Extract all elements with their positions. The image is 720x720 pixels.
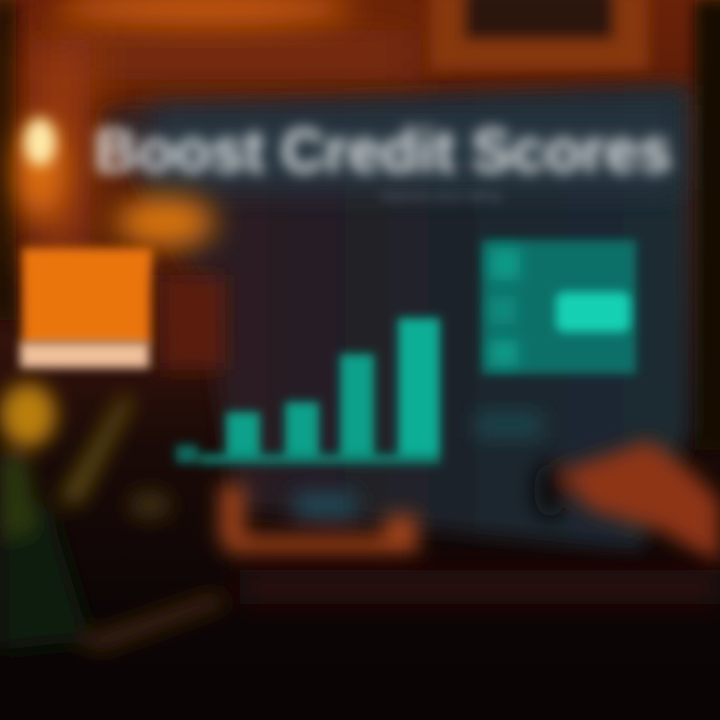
orange box	[20, 248, 225, 370]
ceiling glow	[55, 0, 355, 26]
stand	[220, 485, 418, 555]
small caption	[476, 412, 542, 438]
desk reflection	[240, 570, 720, 604]
title: Boost Credit Scores	[94, 117, 672, 186]
screen panel	[100, 85, 690, 550]
lamp glow	[16, 118, 215, 248]
plant	[0, 383, 232, 652]
subtitle: Improve your rating	[380, 187, 501, 203]
hand	[534, 440, 720, 565]
teal info panel	[482, 240, 636, 374]
wall frame	[430, 0, 648, 70]
bar chart	[176, 318, 440, 464]
